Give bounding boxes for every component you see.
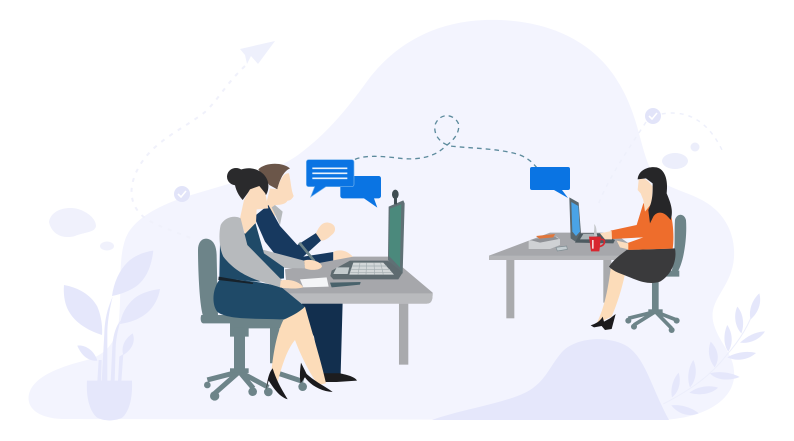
laptop display [389,204,401,267]
desk lip [271,293,433,304]
laptop display [571,202,580,236]
woman legs [597,268,625,323]
desk legs [506,259,514,318]
desk top [271,257,433,304]
stack of books [529,234,560,249]
chair stem [652,277,659,310]
heels [591,314,616,330]
cloud right [662,153,688,169]
webcam [392,190,399,204]
potted plant [64,251,160,420]
dashed connection between bubbles [355,116,537,168]
man shirt [272,205,283,225]
right desk scene [489,167,686,333]
laptop screen [388,200,405,274]
woman far arm [250,221,305,268]
woman belt [218,277,253,284]
desk top [489,233,646,260]
man shoes [322,373,357,382]
paper [300,277,329,287]
desk back leg [603,259,611,303]
bubble front with lines [306,160,354,197]
woman legs [272,307,326,385]
trackpad [333,267,349,274]
left speech bubbles [306,160,381,208]
woman sleeve [219,217,283,287]
dashed route right [598,113,722,205]
desk leg [399,304,408,365]
keyboard [580,234,602,239]
woman hands [280,260,322,288]
woman dress bodice [219,222,284,282]
decorative hill [432,339,669,420]
microphone [299,243,319,275]
paper plane [240,41,275,64]
chair base [207,372,303,394]
woman skirt [213,280,305,319]
chair seat [660,271,679,277]
man face [265,173,294,217]
red mug [589,237,605,251]
chair back [672,215,686,273]
bubble back [340,176,381,208]
small dot right [690,142,700,152]
woman top [611,202,673,250]
woman skirt [609,248,675,283]
chair seat [201,315,287,337]
laptop screen [569,197,581,242]
laptop base [575,233,615,243]
woman hair [227,168,268,200]
right speech bubble [530,167,570,198]
check badge right [645,108,661,124]
woman face and neck [240,186,268,234]
woman hair [638,167,672,223]
check badge left [174,186,190,202]
desk lip [489,256,646,260]
cloud small left [100,242,114,250]
cloud left [49,208,96,237]
man pants [302,302,343,374]
steam [594,224,597,236]
pen and glasses [330,282,361,287]
man hair [258,164,290,189]
man jacket [254,205,333,267]
chair wheels [625,318,680,333]
laptop base [330,261,403,279]
chair wheels [204,368,307,401]
hands [600,231,628,249]
keyboard [349,263,394,275]
dashed route left [132,66,245,240]
chair stem [234,327,279,370]
man hands [316,223,353,266]
woman face and neck [638,179,653,212]
left desk scene [198,164,433,401]
branch right [663,293,765,415]
phone [556,246,567,251]
chair back [198,239,218,317]
woman heels [266,363,333,399]
chair base [628,311,677,328]
